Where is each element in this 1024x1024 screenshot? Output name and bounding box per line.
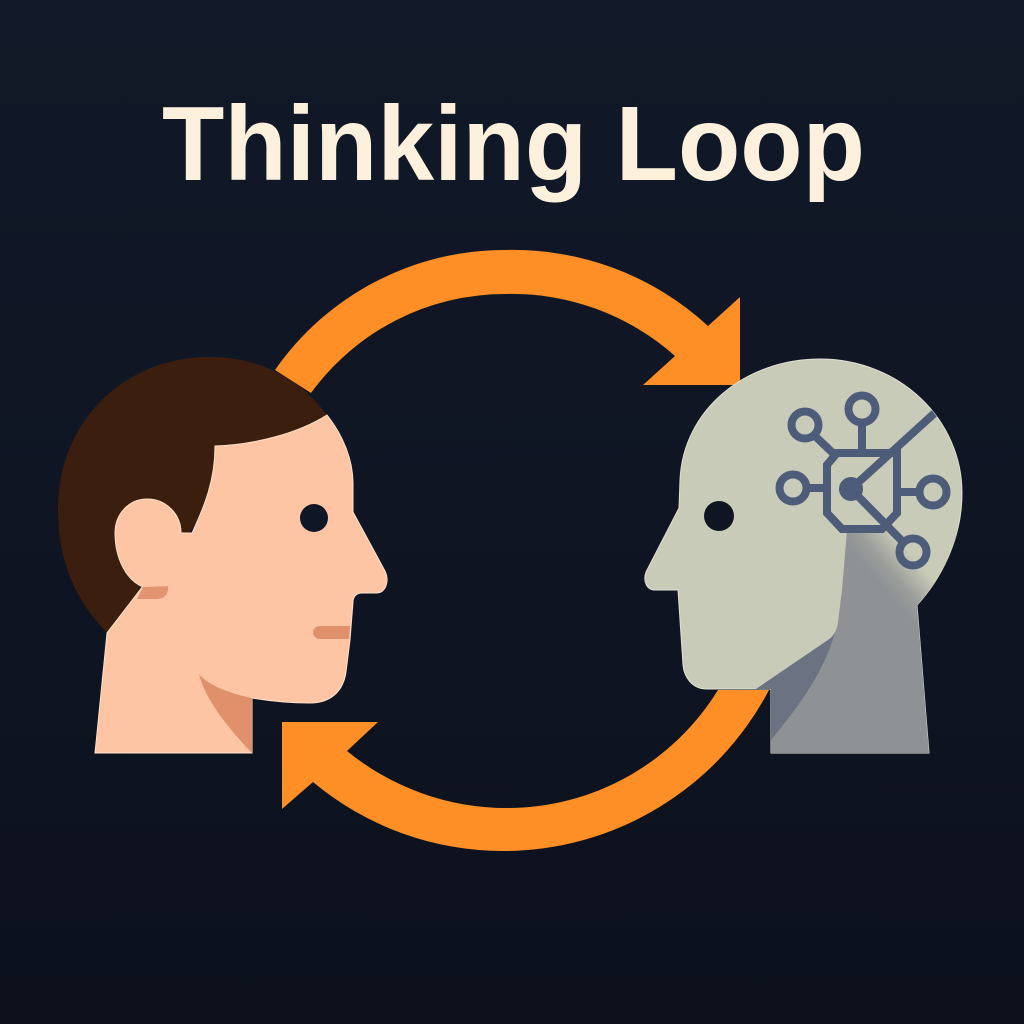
node bottom right	[900, 538, 926, 566]
mouth	[313, 626, 350, 639]
circuit connectors	[807, 410, 938, 542]
jaw shadow	[199, 674, 252, 753]
node top	[848, 396, 876, 422]
human head	[58, 357, 387, 753]
title: Thinking Loop	[162, 85, 865, 203]
head silhouette	[645, 359, 962, 753]
ear	[115, 499, 200, 587]
darker jaw shadow	[756, 632, 835, 740]
infographic: thinking loop	[58, 103, 962, 851]
neck shading	[756, 530, 970, 760]
ear outline	[115, 499, 181, 587]
circuit board outline	[827, 453, 897, 529]
eye	[300, 504, 328, 532]
node right	[920, 478, 946, 506]
circuit icon	[780, 396, 946, 566]
arrow: top arc from human to AI	[275, 250, 740, 393]
central hub	[843, 481, 859, 497]
AI head	[645, 359, 970, 760]
ear shadow	[137, 586, 168, 599]
eye	[704, 501, 734, 531]
face and neck	[95, 415, 387, 753]
arrow: bottom arc from AI to human	[282, 690, 769, 851]
node left	[780, 474, 806, 502]
hair	[58, 357, 327, 633]
node top left	[792, 412, 818, 438]
